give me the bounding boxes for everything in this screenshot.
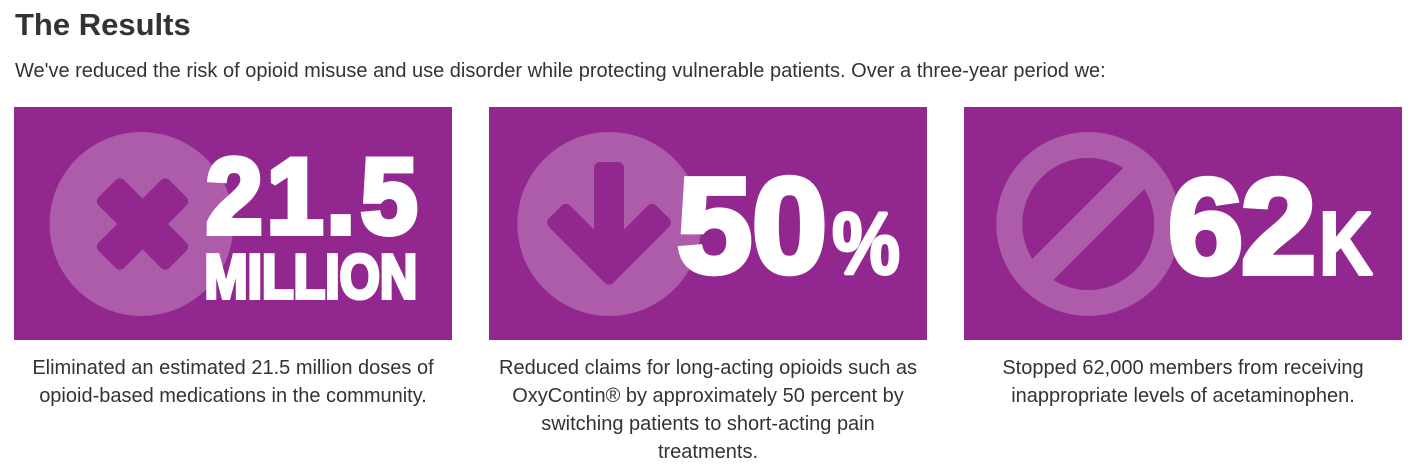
- title: The Results: [15, 7, 191, 42]
- panel: 50 percent: [489, 107, 927, 340]
- caption: 62k: [1002, 357, 1364, 407]
- caption: 50 percent: Reduced claims for long-acting opioids such as: [499, 357, 917, 379]
- caption: 50 percent: switching patients to short-acting pain: [541, 413, 875, 435]
- caption: 50 percent: treatments.: [658, 441, 758, 463]
- icon: down arrow in circle: [517, 132, 701, 316]
- panel background: [964, 107, 1402, 340]
- caption: 50 percent: [499, 357, 917, 463]
- caption: 50 percent: OxyContin® by approximately 50 percent by: [512, 385, 904, 407]
- stat: k: K: [1319, 193, 1373, 294]
- intro text: We've reduced the risk of opioid misuse and use disorder while protecting vulnerable patients. Over a three-year period we:: [15, 60, 1106, 82]
- panel background: [489, 107, 927, 340]
- panel background: [14, 107, 452, 340]
- icon: prohibition sign: [1009, 145, 1167, 303]
- stat: percent sign: %: [832, 195, 900, 293]
- caption: 21.5 million: [32, 357, 434, 407]
- stat: 62: 62: [1168, 151, 1316, 302]
- caption: 62k: Stopped 62,000 members from receiving: [1002, 357, 1364, 379]
- panel: 62k: [964, 107, 1402, 340]
- caption: 21.5 million: opioid-based medications in the community.: [39, 385, 427, 407]
- stat: million: MILLION: [204, 243, 417, 312]
- panel: 21.5 million: [14, 107, 452, 340]
- stat: 21.5: 21.5: [206, 138, 417, 257]
- stat: 50: 50: [677, 150, 827, 301]
- icon: x in circle: [50, 132, 234, 316]
- caption: 21.5 million: Eliminated an estimated 21.5 million doses of: [32, 357, 434, 379]
- caption: 62k: inappropriate levels of acetaminophen.: [1011, 385, 1355, 407]
